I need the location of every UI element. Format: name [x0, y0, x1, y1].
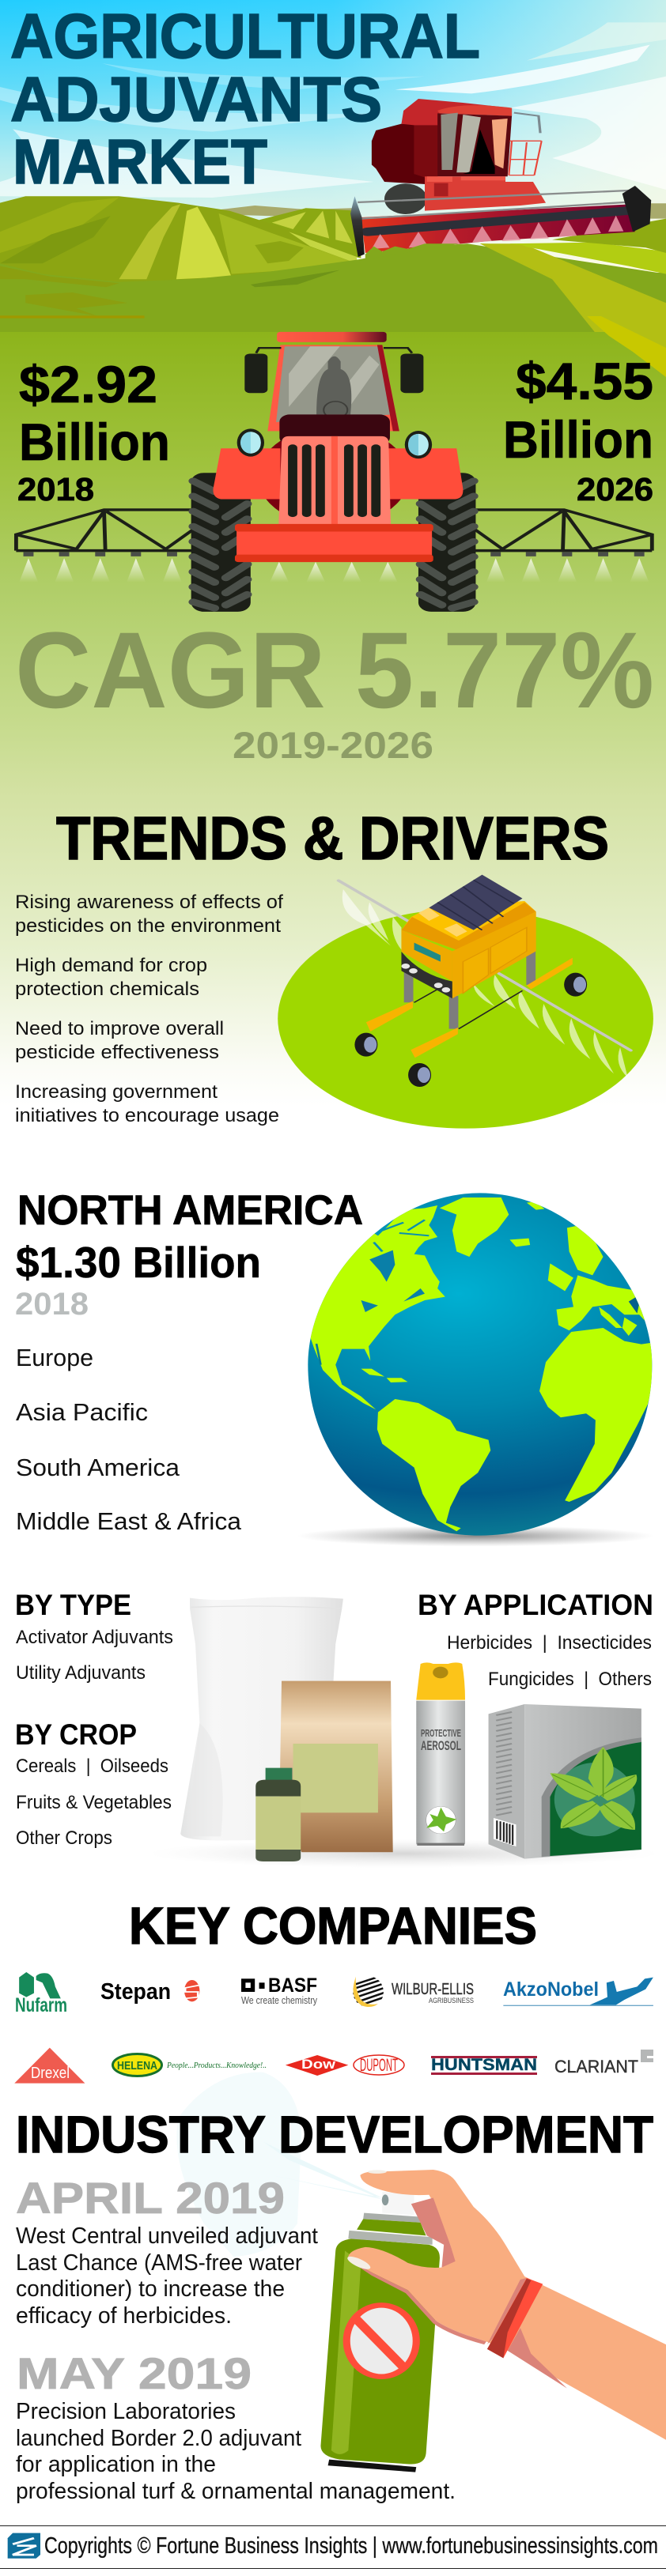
panel: by type: Activator Adjuvants	[16, 1627, 173, 1648]
logo: Clariant	[554, 2050, 653, 2076]
logo: Helena	[112, 2054, 267, 2076]
icon: spray can held by hand	[176, 2072, 666, 2472]
icon: globe	[297, 1193, 654, 1547]
stat: 2026 market size: Billion	[503, 410, 653, 469]
development: May 2019	[16, 2348, 456, 2504]
logo: BASF: BASF	[268, 1974, 317, 1997]
logo: Wilbur-Ellis	[348, 1975, 474, 2007]
CAGR figure: CAGR 5.77%	[15, 610, 654, 731]
logo: BASF	[241, 1974, 317, 2006]
panel: by type: BY TYPE	[15, 1589, 131, 1621]
logo: Stepan: Stepan	[100, 1979, 171, 2005]
logo: DuPont	[354, 2055, 404, 2075]
stat: 2026 market size	[503, 352, 653, 507]
icon: combine harvester	[350, 99, 651, 259]
logo: Drexel	[14, 2048, 85, 2084]
panel: by application: BY APPLICATION	[418, 1589, 653, 1621]
icon: product packages	[149, 1597, 658, 1868]
logo: Wilbur-Ellis: WILBUR-ELLIS	[392, 1981, 474, 1998]
logo: AkzoNobel	[503, 1978, 653, 2006]
list: trends and drivers	[15, 892, 283, 1126]
logo: Huntsman: HUNTSMAN	[431, 2056, 537, 2074]
heading: trends and drivers: TRENDS & DRIVERS	[56, 805, 609, 873]
icon: product packages: PROTECTIVE	[421, 1727, 461, 1739]
list: trends and drivers: Rising awareness of effects of	[15, 892, 283, 913]
panel: by application: Herbicides | Insecticides	[447, 1632, 652, 1654]
heading: key companies: KEY COMPANIES	[129, 1896, 537, 1955]
panel: by crop: Cereals | Oilseeds	[16, 1756, 168, 1777]
regional leader: north america: NORTH AMERICA	[17, 1187, 363, 1234]
stat: 2026 market size: $4.55	[516, 352, 653, 410]
list: trends and drivers: Need to improve overall	[15, 1018, 224, 1039]
background gradient	[0, 261, 666, 1115]
list: other regions: Europe	[16, 1344, 93, 1371]
footer logo	[8, 2533, 40, 2559]
logo: Drexel: Drexel	[31, 2065, 70, 2082]
panel: by crop: BY CROP	[15, 1718, 137, 1751]
logo: AkzoNobel: AkzoNobel	[503, 1978, 599, 2001]
logo: BASF: We create chemistry	[241, 1994, 317, 2006]
icon: autonomous field sprayer on green disc	[278, 875, 653, 1129]
panel: by type: Utility Adjuvants	[16, 1662, 146, 1684]
CAGR figure: 2019-2026	[233, 724, 433, 766]
title: ADJUVANTS	[10, 64, 382, 134]
list: other regions: Asia Pacific	[16, 1398, 148, 1426]
stat: 2026 market size: 2026	[577, 471, 653, 507]
list: trends and drivers: High demand for crop	[15, 955, 207, 976]
list: trends and drivers: protection chemicals	[15, 979, 199, 1000]
logo: Clariant: CLARIANT	[554, 2057, 638, 2076]
development: May 2019: Precision Laboratories	[16, 2399, 236, 2424]
regional leader: north america: 2018	[15, 1287, 89, 1322]
development: April 2019: Last Chance (AMS-free water	[16, 2250, 302, 2276]
logo: Nufarm	[15, 1972, 67, 2016]
development: April 2019: efficacy of herbicides.	[16, 2303, 232, 2329]
development: May 2019: professional turf & ornamental management.	[16, 2479, 456, 2504]
development: May 2019: launched Border 2.0 adjuvant	[16, 2426, 301, 2451]
stat: 2018 market size: 2018	[17, 471, 94, 507]
list: trends and drivers: pesticides on the environment	[15, 915, 281, 937]
list: other regions: Middle East & Africa	[16, 1507, 242, 1535]
logo: Wilbur-Ellis: AGRIBUSINESS	[429, 1997, 474, 2005]
development: April 2019: APRIL 2019	[16, 2173, 285, 2223]
stat: 2018 market size: $2.92	[19, 355, 157, 413]
panel: by crop: Other Crops	[16, 1827, 112, 1849]
panel: by application	[418, 1589, 653, 1690]
logo: Nufarm: Nufarm	[15, 1994, 67, 2016]
stat: 2018 market size: Billion	[19, 413, 170, 471]
list: other regions	[16, 1344, 242, 1535]
development: April 2019: West Central unveiled adjuvant	[16, 2223, 318, 2249]
panel: by type	[15, 1589, 173, 1684]
development: May 2019: MAY 2019	[17, 2348, 252, 2398]
logo: Dow: Dow	[301, 2057, 336, 2072]
logo: Dow	[286, 2055, 348, 2076]
list: trends and drivers: initiatives to encourage usage	[15, 1105, 279, 1126]
icon: tractor with spray booms	[16, 332, 652, 612]
logo: Helena: HELENA	[117, 2059, 157, 2072]
list: trends and drivers: Increasing government	[15, 1081, 218, 1103]
panel: by crop	[15, 1718, 172, 1849]
stat: 2018 market size	[17, 355, 170, 507]
list: trends and drivers: pesticide effectiveness	[15, 1042, 219, 1063]
development: April 2019	[16, 2173, 318, 2329]
panel: by application: Fungicides | Others	[488, 1669, 652, 1690]
regional leader: north america	[15, 1187, 363, 1322]
header scene: sky and hills	[0, 0, 666, 377]
icon: product packages: AEROSOL	[421, 1738, 461, 1753]
title: MARKET	[13, 126, 267, 197]
panel: by crop: Fruits & Vegetables	[16, 1792, 172, 1813]
title: AGRICULTURAL	[10, 1, 480, 71]
list: other regions: South America	[16, 1454, 180, 1481]
development: May 2019: for application in the	[16, 2452, 216, 2477]
logo: Helena: People...Products...Knowledge!..	[166, 2061, 267, 2070]
development: April 2019: conditioner) to increase the	[16, 2276, 285, 2302]
title	[10, 1, 480, 197]
logo: DuPont: DUPONT	[360, 2055, 398, 2075]
regional leader: north america: $1.30 Billion	[16, 1238, 261, 1287]
